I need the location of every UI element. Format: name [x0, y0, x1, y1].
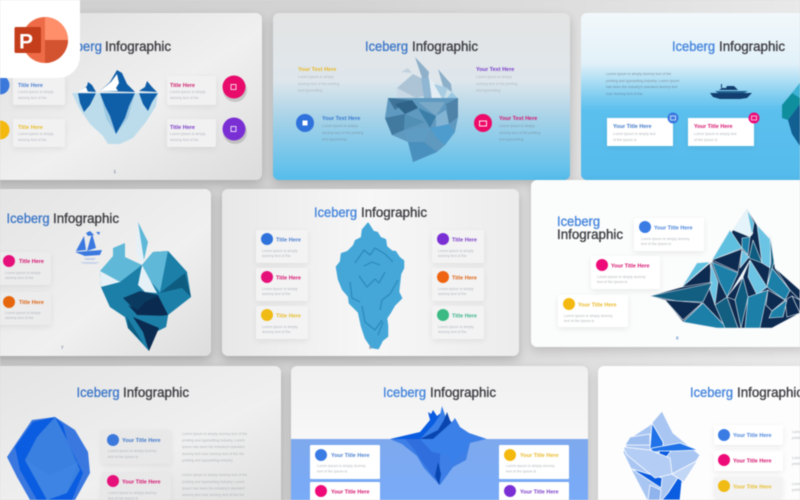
panel: slide 1 iceberg with side cards — [0, 13, 262, 184]
card: your title blue: Your Title Here — [331, 453, 370, 459]
card: title here pink: dummy text of the — [262, 292, 291, 296]
card: title here pink: dummy text of the — [5, 276, 34, 280]
text block: purple: and typesetting — [476, 88, 500, 92]
card: title here pink — [0, 252, 51, 285]
text block: body lower: Ipsum has been the industry's standard — [182, 486, 245, 490]
heading slide 2 — [365, 39, 478, 54]
icon: PowerPoint logo on white corner badge — [0, 0, 80, 78]
card: your title blue: text of the Ipsum is — [317, 470, 347, 474]
text block: pink — [499, 116, 540, 142]
card: your title yellow: text of the Ipsum is — [506, 470, 536, 474]
card: title here orange: Lorem ipsum is simply — [438, 287, 474, 291]
card: your title blue: Your Title Here — [733, 433, 772, 439]
text block: purple: Lorem Ipsum is simply — [476, 75, 512, 79]
card: title here orange: dummy text of the — [438, 292, 467, 296]
card: title here green: Lorem ipsum is simply — [438, 325, 474, 329]
card: title here blue — [256, 230, 308, 263]
heading slide 4 — [6, 211, 119, 226]
heading slide 7 — [76, 385, 189, 400]
text block: intro — [606, 72, 679, 96]
text block: blue: Your Text Here — [322, 116, 360, 122]
heading slide 5 — [314, 205, 427, 220]
card: title here purple: Title Here — [170, 125, 195, 131]
card: title here pink: Lorem ipsum is simply — [5, 271, 41, 275]
card: your title pink: Lorem Ipsum is simply text — [694, 132, 737, 136]
page number 8: 8 — [676, 336, 679, 340]
card: your title blue: Lorem Ipsum is simply text — [613, 132, 656, 136]
heading slide 5: Iceberg — [314, 205, 357, 220]
card: title here orange: Title Here — [452, 276, 477, 282]
heading slide 6 — [557, 214, 623, 242]
text block: pink: Lorem Ipsum is simply — [499, 124, 535, 128]
icon: yellow circle — [0, 120, 10, 140]
card: title here yellow: dummy text of the — [262, 330, 291, 334]
text block: body lower — [182, 473, 247, 497]
panel: slide 9 faceted iceberg with list — [598, 366, 800, 500]
card: title here purple: Lorem ipsum is simply — [170, 132, 206, 136]
icon: pink circle — [222, 76, 247, 102]
page number 1: 1 — [114, 169, 116, 174]
panel: slide 5 rounded iceberg with six cards — [222, 189, 519, 360]
text block: blue: dummy text of the printing — [322, 131, 363, 135]
card: title here orange — [0, 292, 51, 325]
card: title here purple — [167, 119, 216, 147]
heading slide 7: Infographic — [123, 385, 189, 400]
card: your title pink: Your Title Here — [694, 124, 733, 130]
text block: pink: and typesetting — [499, 138, 523, 142]
card: your title blue: of the Ipsum is — [613, 138, 637, 142]
card: title here blue: Lorem ipsum is simply — [18, 90, 54, 94]
icon: blue thumb — [296, 114, 314, 132]
card: title here yellow: Title Here — [276, 314, 301, 320]
icon: ship — [710, 84, 752, 99]
text block: purple: dummy text of the printing — [476, 82, 517, 86]
text block: purple — [476, 67, 517, 92]
card: title here pink: Lorem ipsum is simply — [262, 287, 298, 291]
panel: slide 2 low poly iceberg on sea gradient — [273, 13, 570, 184]
text block: body upper: printing and typesetting industry — [182, 458, 233, 462]
card: title here purple: Lorem ipsum is simply — [438, 249, 474, 253]
card: title here yellow — [13, 119, 65, 147]
chart: iceberg 5 blob — [337, 224, 403, 348]
card: your title yellow: Your Title Here — [733, 484, 772, 490]
panel: slide 3 ship and iceberg — [581, 13, 800, 180]
card: your title yellow — [714, 477, 783, 497]
card: title here yellow — [256, 306, 308, 339]
card: title here green: dummy text of the — [438, 330, 467, 334]
icon: blue badge — [668, 112, 678, 124]
card: title here purple — [432, 230, 484, 263]
card: your title yellow: Your Title Here — [578, 302, 617, 308]
text block: yellow: Lorem Ipsum is simply — [298, 75, 334, 79]
heading slide 8: Infographic — [430, 385, 496, 400]
card: your title pink: Your Title Here — [611, 264, 650, 270]
card: your title blue — [714, 425, 783, 445]
heading slide 6: Infographic — [557, 227, 623, 242]
text block: yellow: Your Text Here — [298, 67, 336, 73]
card: your title blue — [634, 218, 704, 251]
card: title here pink: Title Here — [19, 259, 44, 265]
panel: slide 6 dark polygon iceberg — [531, 180, 800, 351]
card: title here pink: dummy text of the — [170, 96, 199, 100]
card: your title yellow — [499, 445, 569, 479]
card: title here purple: dummy text of the — [170, 138, 199, 142]
card: title here blue: Lorem ipsum is simply — [262, 249, 298, 253]
text block: blue: and typesetting — [322, 138, 346, 142]
chart: iceberg 2 — [385, 57, 459, 162]
text block: intro: printing and typesetting industry. Lorem Ipsum — [606, 79, 679, 83]
chart: iceberg 4 — [100, 222, 191, 351]
heading slide 2: Infographic — [412, 39, 478, 54]
text block: yellow: dummy text of the printing — [298, 82, 339, 86]
text block: yellow: and typesetting — [298, 88, 322, 92]
chart: iceberg 7 — [7, 417, 90, 500]
card: your title blue: Your Title Here — [654, 226, 693, 232]
card: your title pink — [688, 118, 754, 146]
heading slide 8: Iceberg — [383, 385, 426, 400]
card: title here orange: Title Here — [19, 300, 44, 306]
card: your title pink — [714, 451, 783, 471]
page number 5: 9 — [369, 345, 372, 350]
heading slide 3: Infographic — [719, 39, 785, 54]
card: your title blue: text of the Ipsum is — [108, 455, 138, 459]
heading slide 3: Iceberg — [672, 39, 715, 54]
card: title here pink — [256, 268, 308, 301]
panel: slide 8 iceberg reflected at waterline — [291, 366, 588, 500]
heading slide 4: Iceberg — [6, 211, 50, 226]
text block: blue — [322, 116, 363, 142]
card: your title pink: of the Ipsum is — [694, 138, 718, 142]
text block: side notes — [792, 430, 800, 492]
panel: slide 4 sailing ship and iceberg — [0, 189, 211, 360]
card: title here pink — [167, 76, 216, 105]
card: your title pink: Lorem Ipsum is simply dummy — [597, 275, 646, 279]
card: your title pink: Lorem Ipsum is simply dummy — [108, 491, 157, 495]
card: your title pink: Your Title Here — [122, 480, 161, 486]
text block: intro: ever dummy text of the — [606, 92, 643, 96]
card: title here yellow: Title Here — [18, 125, 43, 131]
card: your title blue: text of the Ipsum is — [641, 242, 671, 246]
heading slide 2: Iceberg — [365, 39, 408, 54]
heading slide 6: Iceberg — [557, 214, 600, 229]
heading slide 5: Infographic — [361, 205, 427, 220]
heading slide 1: Iceberg — [58, 39, 102, 54]
card: title here blue: dummy text of the — [262, 254, 291, 258]
card: your title blue: Lorem Ipsum is simply dummy — [108, 449, 157, 453]
card: your title yellow: text of the Ipsum is — [564, 319, 594, 323]
text block: body upper: printing and typesetting industry. Lorem — [182, 438, 245, 442]
text block: body upper: dummy text ever dummy text of the the — [182, 452, 244, 456]
text block: body upper: Ipsum has been the industry's standard — [182, 445, 245, 449]
heading slide 1 — [58, 39, 171, 54]
card: title here purple: dummy text of the — [438, 254, 467, 258]
card: your title purple: Your Title Here — [520, 490, 559, 496]
card: your title yellow: Lorem Ipsum is simply dummy — [506, 464, 555, 468]
text block: blue: Lorem Ipsum is simply — [322, 124, 358, 128]
heading slide 9: Iceberg — [690, 385, 733, 400]
card: your title blue — [607, 118, 673, 146]
card: your title yellow: Lorem Ipsum is simply dummy — [564, 314, 613, 318]
card: title here blue — [13, 76, 65, 105]
panel: slide 7 blue iceberg with text — [0, 366, 281, 500]
card: your title pink — [102, 472, 171, 500]
heading slide 4: Infographic — [53, 211, 119, 226]
card: title here yellow: dummy text of the — [18, 138, 47, 142]
card: your title pink: text of the Ipsum is — [597, 280, 627, 284]
card: title here yellow: Lorem ipsum is simply — [262, 325, 298, 329]
icon: pink badge — [748, 112, 760, 124]
text block: body lower: printing and typesetting industry. Lorem — [182, 480, 245, 484]
card: your title pink — [310, 482, 380, 500]
text block: pink: Your Text Here — [499, 116, 537, 122]
heading slide 8 — [383, 385, 496, 400]
chart: iceberg 9 — [623, 411, 700, 500]
card: your title blue: Lorem Ipsum is simply dummy — [317, 464, 366, 468]
card: title here blue: Title Here — [276, 238, 301, 244]
card: title here purple: Title Here — [452, 238, 477, 244]
text block: pink: dummy text of the printing — [499, 131, 540, 135]
card: your title pink: Your Title Here — [733, 458, 772, 464]
text block: body lower: Lorem Ipsum is simply dummy text of the — [182, 473, 247, 477]
card: title here blue: Title Here — [18, 83, 43, 89]
card: title here orange — [432, 268, 484, 301]
text block: intro: Lorem Ipsum is simply dummy text of the — [606, 72, 671, 76]
chart: iceberg 6 — [650, 209, 800, 328]
card: your title purple — [499, 482, 569, 500]
heading slide 7: Iceberg — [76, 385, 120, 400]
card: your title pink — [591, 256, 660, 289]
icon: purple circle — [222, 118, 247, 144]
heading slide 9 — [690, 385, 800, 400]
text block: yellow — [298, 67, 339, 92]
chart: iceberg 3 cropped — [782, 83, 800, 146]
text block: body upper: Lorem Ipsum is simply dummy text of the — [182, 432, 247, 436]
heading slide 3 — [672, 39, 785, 54]
icon: pink box — [474, 114, 492, 132]
heading slide 1: Infographic — [105, 39, 171, 54]
chart: iceberg 8 — [390, 406, 487, 485]
text block: purple: Your Text Here — [476, 67, 514, 73]
icon: blue circle — [0, 76, 10, 94]
page number 7: 7 — [61, 345, 64, 350]
card: title here orange: dummy text of the — [5, 316, 34, 320]
card: title here pink: Lorem ipsum is simply — [170, 90, 206, 94]
card: title here blue: dummy text of the — [18, 96, 47, 100]
text block: intro: has been the industry's standard dummy text — [606, 85, 677, 89]
card: title here pink: Title Here — [276, 276, 301, 282]
text block: body upper — [182, 432, 247, 462]
card: your title blue: Lorem Ipsum is simply dummy — [641, 237, 690, 241]
card: title here green: Title Here — [452, 314, 477, 320]
icon: PowerPoint logo on white corner badge: P — [19, 30, 33, 54]
card: title here orange: Lorem ipsum is simply — [5, 311, 41, 315]
chart: iceberg 1 — [72, 70, 158, 144]
card: your title yellow: Your Title Here — [520, 453, 559, 459]
card: your title blue: Your Title Here — [613, 124, 652, 130]
card: your title yellow — [558, 295, 628, 327]
card: title here pink: Title Here — [170, 83, 195, 89]
card: your title blue — [102, 430, 171, 464]
card: title here yellow: Lorem ipsum is simply — [18, 132, 54, 136]
card: your title blue — [310, 445, 380, 479]
text block: body lower: dummy text ever dummy text of the the — [182, 493, 244, 497]
icon: sailing ship — [75, 231, 102, 264]
card: your title pink: Your Title Here — [331, 490, 370, 496]
card: your title blue: Your Title Here — [122, 438, 161, 444]
card: title here green — [432, 306, 484, 339]
